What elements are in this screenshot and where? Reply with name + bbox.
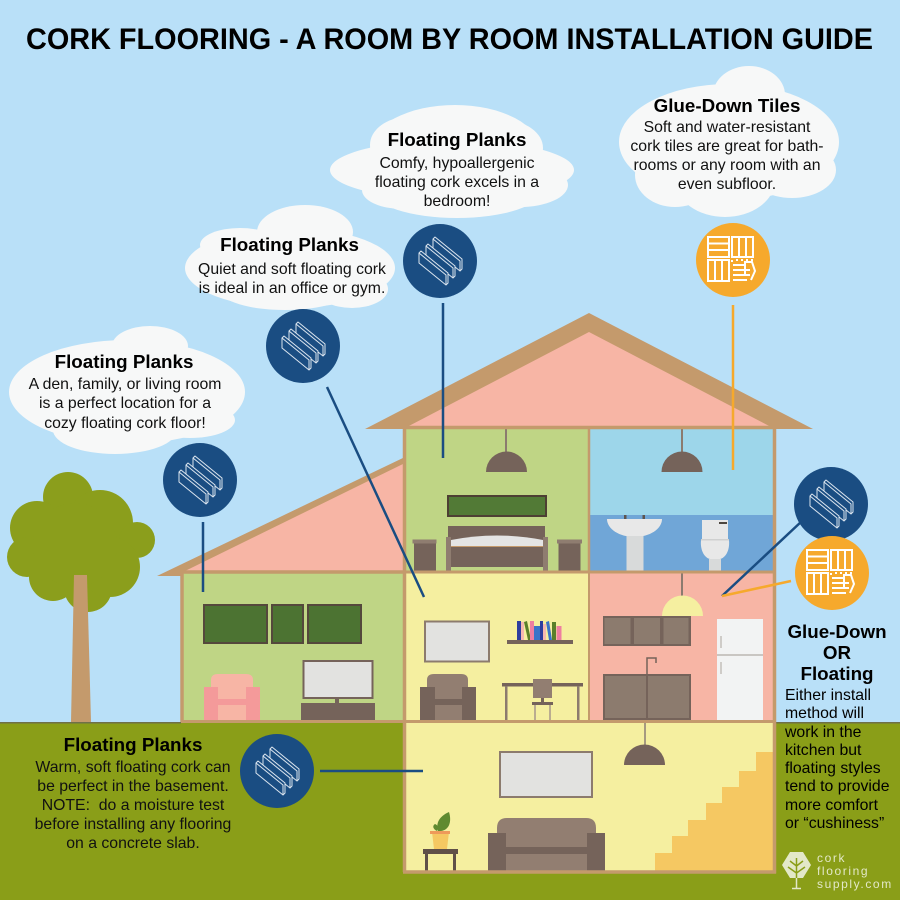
text: NOTE: do a moisture test: [42, 797, 225, 814]
logo mark: [782, 852, 811, 888]
heading: Floating Planks: [64, 734, 202, 755]
text: [198, 261, 386, 297]
room: bedroom: [404, 428, 590, 573]
text: cozy floating cork floor!: [44, 415, 206, 432]
cloud shape: [619, 66, 839, 217]
heading: Glue-Down Tiles: [654, 95, 800, 116]
cloud shape: [185, 205, 395, 310]
icon: planks living room: [163, 443, 237, 517]
connector lines: [203, 303, 802, 771]
icon: planks office: [266, 309, 340, 383]
text: [29, 376, 221, 432]
panel: cloud bedroom: [330, 105, 574, 218]
structural frame: [181, 426, 776, 874]
sink: [607, 515, 662, 572]
nightstands: [412, 540, 582, 571]
heading: Floating Planks: [388, 129, 526, 150]
armchair: [420, 674, 476, 720]
text: Soft and water-resistant: [644, 119, 811, 136]
text: or “cushiness”: [785, 815, 884, 832]
panel: kitchen text: [784, 621, 890, 832]
cloud shape: [9, 326, 245, 454]
upper cabinets: [603, 616, 691, 646]
heading: Floating: [800, 663, 874, 684]
bookshelf: [507, 621, 573, 644]
main roof: [365, 313, 813, 429]
text: on a concrete slab.: [66, 835, 200, 852]
text: Comfy, hypoallergenic: [379, 155, 535, 172]
text: [375, 155, 539, 210]
text: before installing any flooring: [35, 816, 231, 833]
ground: [0, 722, 900, 900]
room: bathroom: [590, 428, 774, 572]
text: Quiet and soft floating cork: [198, 261, 386, 278]
plant on side table: [423, 812, 458, 871]
text: Warm, soft floating cork can: [35, 759, 231, 776]
room: kitchen: [590, 573, 774, 722]
stairs: [655, 752, 773, 871]
logo text: cork: [817, 851, 846, 865]
lamp: [486, 428, 527, 472]
heading: OR: [823, 642, 852, 663]
icon: planks basement: [240, 734, 314, 808]
room: living room: [181, 573, 405, 722]
text: rooms or any room with an: [633, 157, 821, 174]
text: floating cork excels in a: [375, 174, 539, 191]
text: more comfort: [785, 797, 879, 814]
wall frame: [500, 752, 592, 797]
heading: Floating Planks: [220, 234, 359, 255]
house: [157, 313, 813, 874]
text: method will: [785, 705, 864, 722]
cloud shape: [330, 105, 574, 218]
text: is a perfect location for a: [39, 395, 211, 412]
text: [35, 759, 231, 852]
desk and chair: [502, 679, 583, 720]
heading: Glue-Down: [787, 621, 887, 642]
icon: planks bedroom: [403, 224, 477, 298]
title: CORK FLOORING - A ROOM BY ROOM INSTALLATION GUIDE: [26, 23, 873, 56]
panel: cloud bathroom: [619, 66, 839, 217]
panel: cloud living room: [9, 326, 245, 454]
heading: [787, 621, 887, 684]
room: office: [405, 573, 589, 722]
lower left roof: [157, 457, 405, 576]
lamp: [624, 723, 665, 765]
text: tend to provide: [785, 778, 890, 795]
text: be perfect in the basement.: [37, 778, 229, 795]
heading: Floating Planks: [55, 351, 193, 372]
tree: [7, 472, 155, 722]
text: kitchen but: [785, 742, 862, 759]
logo: [782, 851, 893, 891]
text: bedroom!: [424, 193, 490, 210]
text: [630, 119, 824, 193]
lamp: [662, 573, 703, 616]
text: work in the: [784, 724, 862, 741]
icon: planks kitchen: [794, 467, 868, 541]
logo text: flooring: [817, 864, 869, 878]
refrigerator: [717, 619, 763, 720]
bed: [446, 526, 548, 571]
wall art: [204, 605, 361, 643]
panel: cloud office: [185, 205, 395, 310]
sink and lower cabinets: [603, 658, 691, 720]
text: Either install: [785, 687, 871, 704]
icon: tiles bathroom: [696, 223, 770, 297]
text: floating styles: [785, 760, 881, 777]
whiteboard: [425, 622, 489, 662]
sofa: [488, 818, 605, 871]
armchair: [204, 674, 260, 720]
text: cork tiles are great for bath-: [630, 138, 824, 155]
logo text: supply.com: [817, 877, 893, 891]
text: [784, 687, 890, 832]
text: A den, family, or living room: [29, 376, 221, 393]
panel: basement text: [35, 734, 231, 852]
logo text: [817, 851, 893, 891]
room: basement: [405, 723, 774, 872]
television: [301, 661, 375, 720]
headboard art: [448, 496, 546, 516]
lamp: [662, 428, 702, 472]
toilet: [701, 520, 729, 572]
text: is ideal in an office or gym.: [199, 280, 385, 297]
text: even subfloor.: [678, 176, 776, 193]
icon: tiles kitchen: [795, 536, 869, 610]
